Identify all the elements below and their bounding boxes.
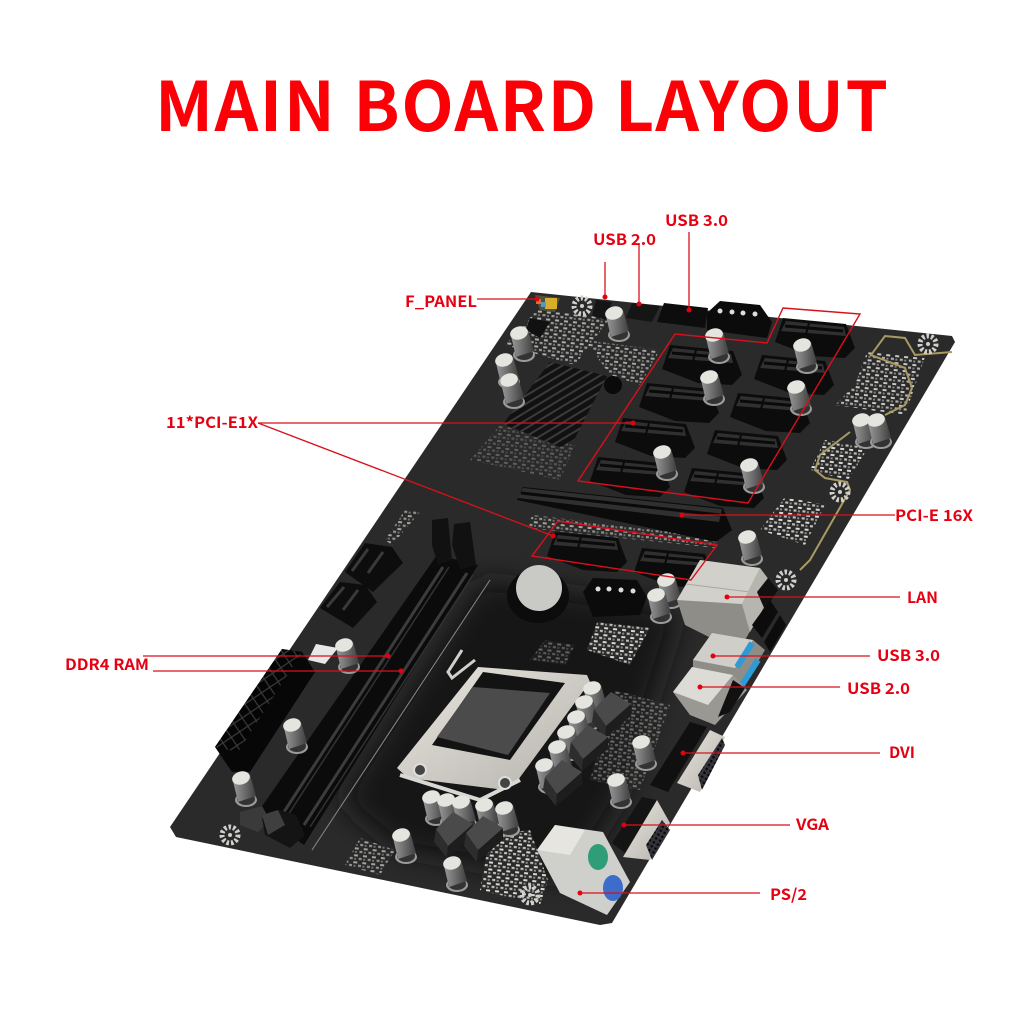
battery: [507, 557, 570, 623]
vga connector: [612, 797, 670, 860]
pci-e x1 slots: [547, 318, 855, 588]
heatsink: [503, 362, 622, 447]
gold traces: [800, 336, 952, 570]
mounting holes: [222, 298, 936, 903]
label: usb 2.0 top: USB 2.0: [593, 228, 656, 250]
label: f_panel: F_PANEL: [405, 290, 477, 312]
label: ddr4 ram: DDR4 RAM: [65, 653, 149, 675]
chokes: [434, 692, 631, 862]
upper pci-e group outline: [578, 308, 860, 503]
capacitors: [231, 304, 892, 892]
label: usb 2.0 rear: USB 2.0: [847, 677, 910, 699]
label: pci-e 16x: PCI-E 16X: [895, 504, 973, 526]
leader lines: [143, 232, 900, 893]
title: MAIN BOARD LAYOUT: [155, 52, 888, 151]
lan port: [677, 560, 786, 652]
darker pcb zone around cpu: [340, 580, 680, 880]
dvi connector: [650, 722, 725, 792]
atx connector: [215, 649, 315, 772]
front panel header: [526, 295, 560, 338]
component clusters: [345, 310, 925, 905]
sata connectors: [320, 543, 403, 628]
label: usb 3.0 top: USB 3.0: [665, 209, 728, 231]
usb 2.0 headers: [592, 300, 660, 322]
lower power connector: [583, 578, 647, 617]
cpu socket: [397, 650, 590, 800]
leader dots: [386, 294, 730, 896]
labels: [65, 209, 973, 905]
label: vga: VGA: [795, 813, 829, 835]
label: usb 3.0 rear: USB 3.0: [877, 644, 940, 666]
usb 2.0 port: [673, 667, 747, 725]
usb 3.0 header: [657, 303, 708, 328]
label: dvi: DVI: [889, 741, 915, 763]
label: lan: LAN: [907, 586, 938, 608]
callout outlines: [532, 308, 860, 580]
pci-e 16x slot: [517, 487, 732, 542]
ram slots: [240, 518, 490, 850]
label: ps/2: PS/2: [770, 883, 807, 905]
motherboard: [170, 292, 955, 925]
board pcb: [170, 292, 955, 925]
label: pci-e x1: 11*PCI-E1X: [166, 411, 258, 433]
qr sticker: [308, 644, 338, 664]
lower pci-e group outline: [532, 521, 717, 580]
usb 3.0 port: [693, 633, 765, 690]
upper power connector: [707, 301, 772, 338]
ps/2 port: [537, 825, 630, 915]
